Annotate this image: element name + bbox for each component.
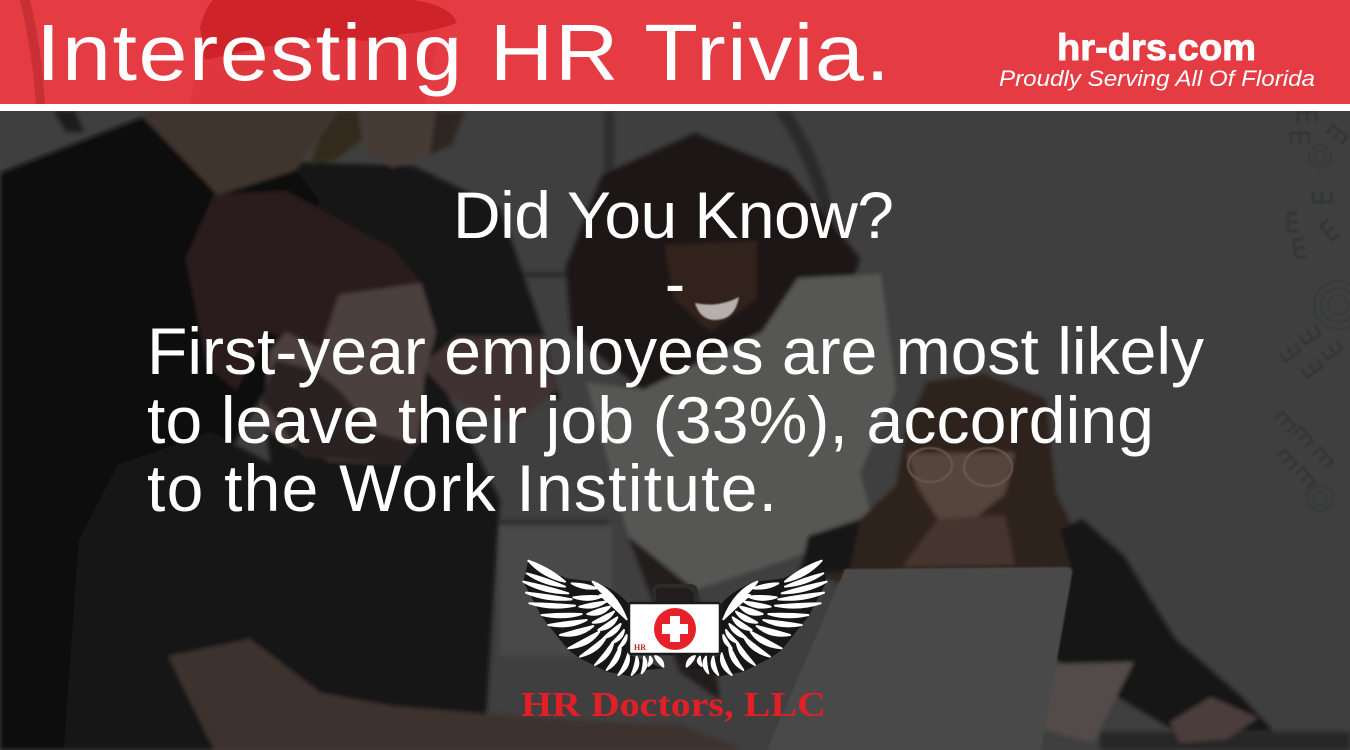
eye chart on wall <box>1275 112 1350 511</box>
fact line 1: First-year employees are most likely <box>147 314 1204 388</box>
title: Interesting HR Trivia. <box>36 8 891 97</box>
icon: medical bag: HR <box>634 643 646 652</box>
company name: HR Doctors, LLC <box>521 685 826 724</box>
right wing <box>687 561 827 677</box>
tagline: Proudly Serving All Of Florida <box>999 66 1315 91</box>
icon: medical bag <box>629 586 720 654</box>
fact line 3: to the Work Institute. <box>147 451 777 525</box>
did you know heading: Did You Know? <box>453 178 894 252</box>
glasses <box>908 448 1012 486</box>
laptop <box>767 567 1072 750</box>
HR Doctors logo <box>521 561 827 724</box>
woman's smile <box>695 297 739 320</box>
fact line 2: to leave their job (33%), according <box>147 383 1154 457</box>
dash: - <box>665 246 685 320</box>
website url: hr-drs.com <box>1057 27 1256 68</box>
header band <box>0 0 1350 111</box>
trivia message <box>147 178 1204 525</box>
left wing <box>523 561 663 677</box>
